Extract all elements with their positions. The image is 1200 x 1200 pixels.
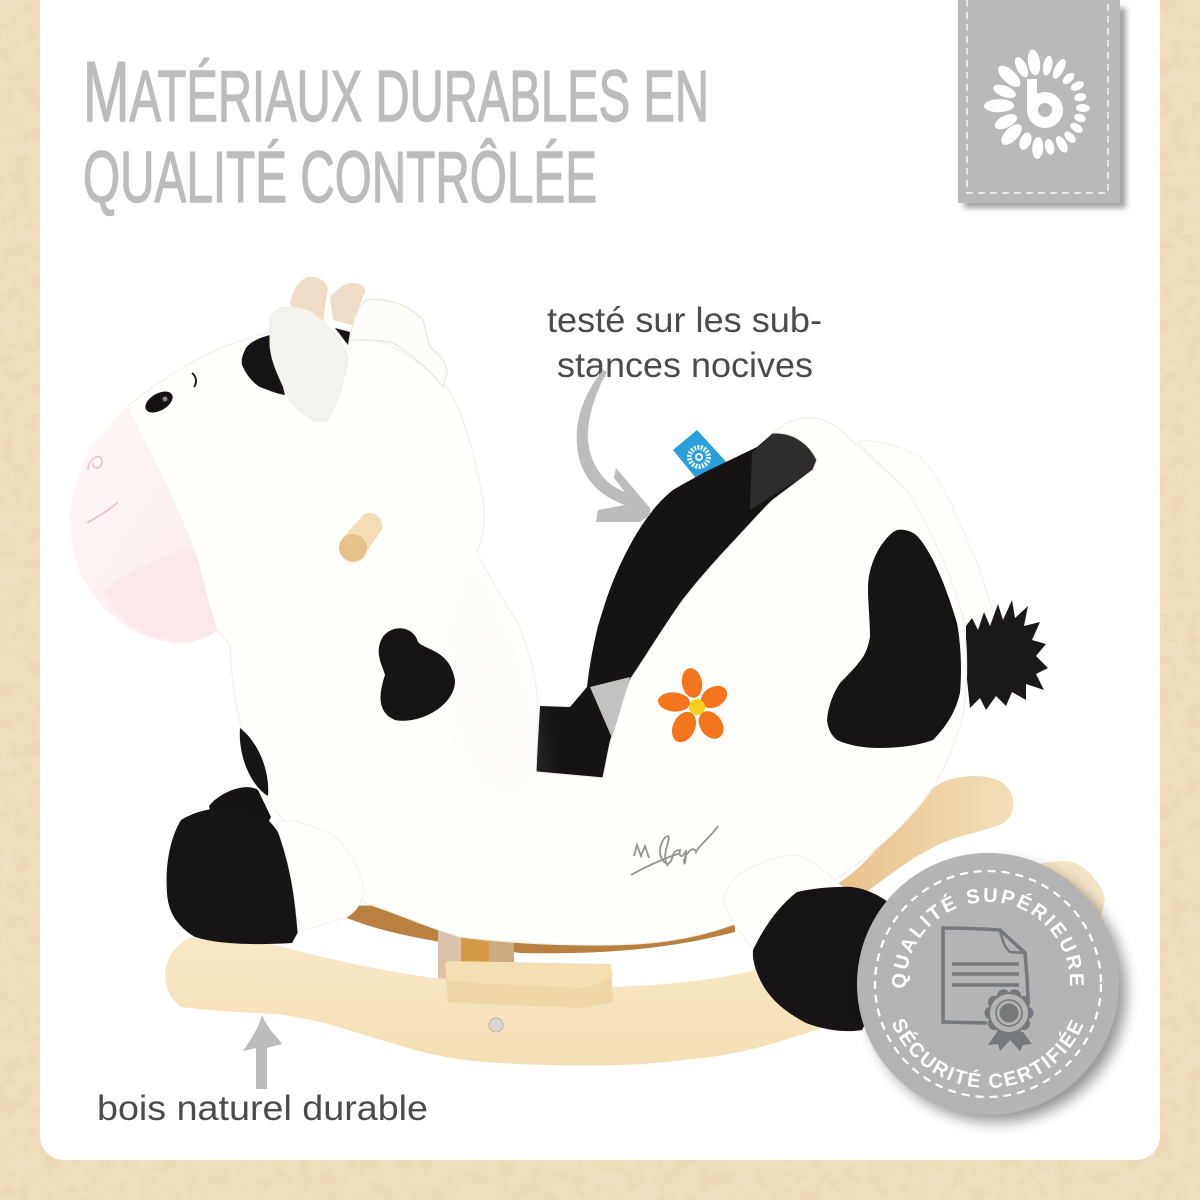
seat block (445, 961, 613, 1008)
label: tested for harmful substances: testé sur les sub- (547, 301, 822, 340)
chest spot (379, 628, 455, 721)
muzzle lower patch (103, 548, 217, 641)
icon: certificate (943, 928, 1034, 1051)
title (83, 45, 709, 218)
ribbon (988, 1032, 1032, 1051)
horns (290, 277, 365, 325)
muzzle (70, 407, 217, 643)
tail tuft (966, 600, 1048, 710)
blue brand label (673, 430, 730, 488)
head black patch (242, 335, 285, 395)
icon: sunflower b logo (984, 49, 1090, 159)
title: QUALITÉ CONTRÔLÉE (83, 138, 597, 218)
front foot (167, 807, 298, 944)
embroidered signature (631, 826, 718, 875)
seat strap (590, 677, 630, 738)
tail (857, 441, 1048, 710)
patch behind ear (335, 328, 350, 345)
hair tuft (350, 299, 447, 387)
seat posts (438, 930, 514, 982)
flower (657, 666, 731, 746)
back seat black upholstery (536, 433, 817, 790)
back foot (753, 887, 892, 1031)
rump spot (827, 530, 961, 748)
arrow: up to wood rocker (243, 1015, 282, 1089)
label: tested for harmful substances (547, 301, 822, 385)
arrow: curved towards seat (577, 370, 650, 522)
rear front foot (209, 787, 271, 835)
seal (984, 989, 1034, 1037)
cow body (127, 330, 967, 945)
title: MATÉRIAUX DURABLES EN (83, 45, 709, 140)
side spot (240, 728, 268, 796)
front leg (275, 821, 365, 932)
label: tested for harmful substances: stances nocives (557, 346, 813, 385)
label: natural wood: bois naturel durable (97, 1089, 428, 1128)
badge text: QUALITÉ SUPÉRIEURE (892, 888, 1084, 988)
quality badge (857, 853, 1135, 1131)
back leg (723, 855, 842, 950)
eye (142, 387, 176, 417)
ear (270, 307, 348, 422)
screw (489, 1018, 503, 1032)
badge text: SÉCURITÉ CERTIFIÉE (893, 1019, 1084, 1088)
wooden handle (339, 513, 382, 562)
rocking cow illustration (70, 277, 1105, 1065)
badge text (892, 888, 1084, 1088)
brand tag with logo (958, 0, 1126, 208)
near rocker (165, 938, 830, 1065)
seat headrest fold (750, 433, 817, 510)
belly shading (455, 560, 538, 791)
nostril and mouth (87, 457, 118, 523)
eyelash (192, 373, 196, 387)
far rocker (342, 776, 1105, 953)
